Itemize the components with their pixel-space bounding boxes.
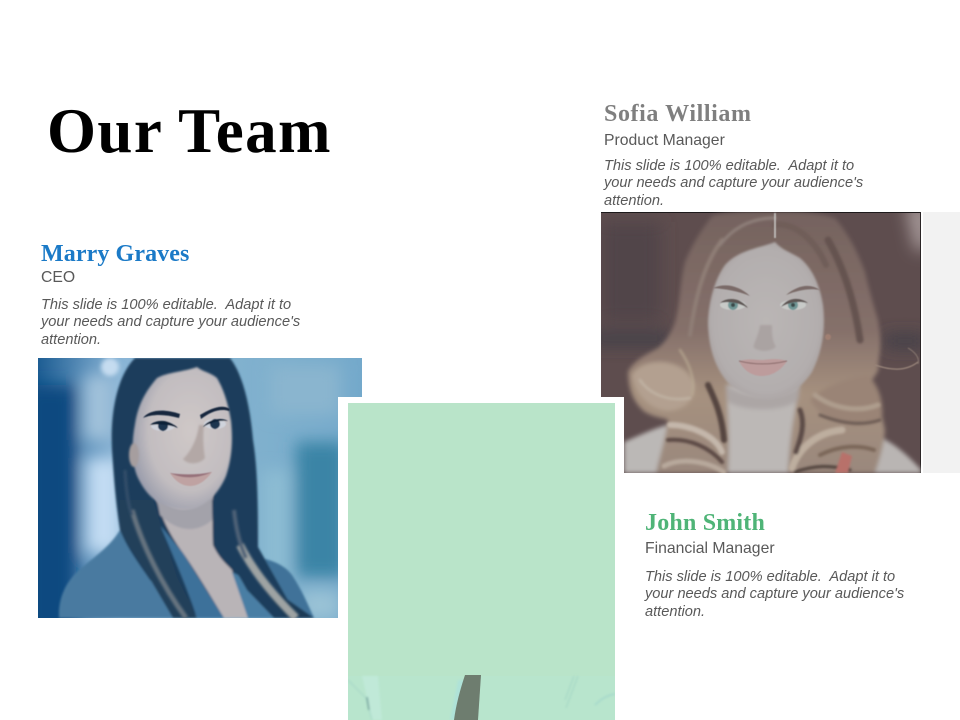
jacket left [58, 530, 174, 618]
eyes [720, 300, 746, 310]
curl streaks [640, 218, 880, 472]
lips [170, 472, 212, 486]
collar highlights [364, 677, 381, 720]
jacket right [264, 558, 314, 618]
description: John Smith: your needs and capture your audience's [645, 586, 904, 602]
panel: light grey strip [923, 212, 960, 473]
description: Marry Graves: your needs and capture your audience's [41, 314, 300, 330]
neck shade [156, 490, 213, 529]
photo: Marry Graves [38, 358, 362, 618]
description: Sofia William [603, 158, 863, 208]
description: Sofia William: your needs and capture your audience's [604, 175, 863, 191]
description: Marry Graves: attention. [41, 332, 101, 348]
lapel [160, 525, 224, 618]
role: Financial Manager: Financial Manager [645, 540, 775, 557]
description: Sofia William: attention. [604, 192, 664, 208]
description: Marry Graves: This slide is 100% editable. Adapt it to [41, 296, 291, 312]
name: Sofia William: Sofia William [604, 101, 752, 127]
tie [454, 675, 481, 720]
description: John Smith: attention. [645, 604, 705, 620]
hair highlights [125, 470, 296, 618]
skin chest [155, 495, 248, 618]
description: John Smith: This slide is 100% editable. Adapt it to [645, 568, 895, 584]
panel: John Smith green photo [348, 403, 615, 720]
panel: Marry Graves text [40, 241, 300, 348]
hair upper mass [112, 358, 258, 618]
neck [726, 385, 800, 473]
right lower hair [211, 500, 288, 618]
earring [825, 334, 831, 340]
description: John Smith [644, 568, 904, 620]
name: John Smith: John Smith [645, 510, 765, 536]
role: Product Manager: Product Manager [604, 132, 725, 149]
shoulders [624, 422, 670, 473]
photo: Sofia William [590, 205, 930, 473]
role: CEO: CEO [41, 269, 75, 286]
right curl shading [812, 382, 884, 420]
panel: John Smith text [644, 510, 904, 620]
face [133, 367, 232, 509]
left lower hair [152, 581, 198, 618]
hair mass [628, 212, 885, 473]
panel: Sofia William text [603, 101, 863, 208]
description: Sofia William: This slide is 100% editable. Adapt it to [604, 158, 854, 174]
nose [754, 325, 776, 351]
left curl highlight [632, 362, 695, 411]
title: Our Team [47, 96, 332, 166]
shirt tint [348, 676, 615, 720]
decorative graphics: photos and panels [38, 212, 960, 720]
description: Marry Graves [40, 296, 300, 348]
eyes [151, 421, 175, 431]
eyebrows [713, 285, 750, 296]
nose shadow [183, 425, 205, 463]
face [708, 242, 824, 399]
name: Marry Graves: Marry Graves [41, 241, 189, 267]
dress [835, 452, 852, 473]
ear [129, 443, 139, 467]
lips [739, 359, 787, 376]
eyebrows [143, 411, 180, 418]
